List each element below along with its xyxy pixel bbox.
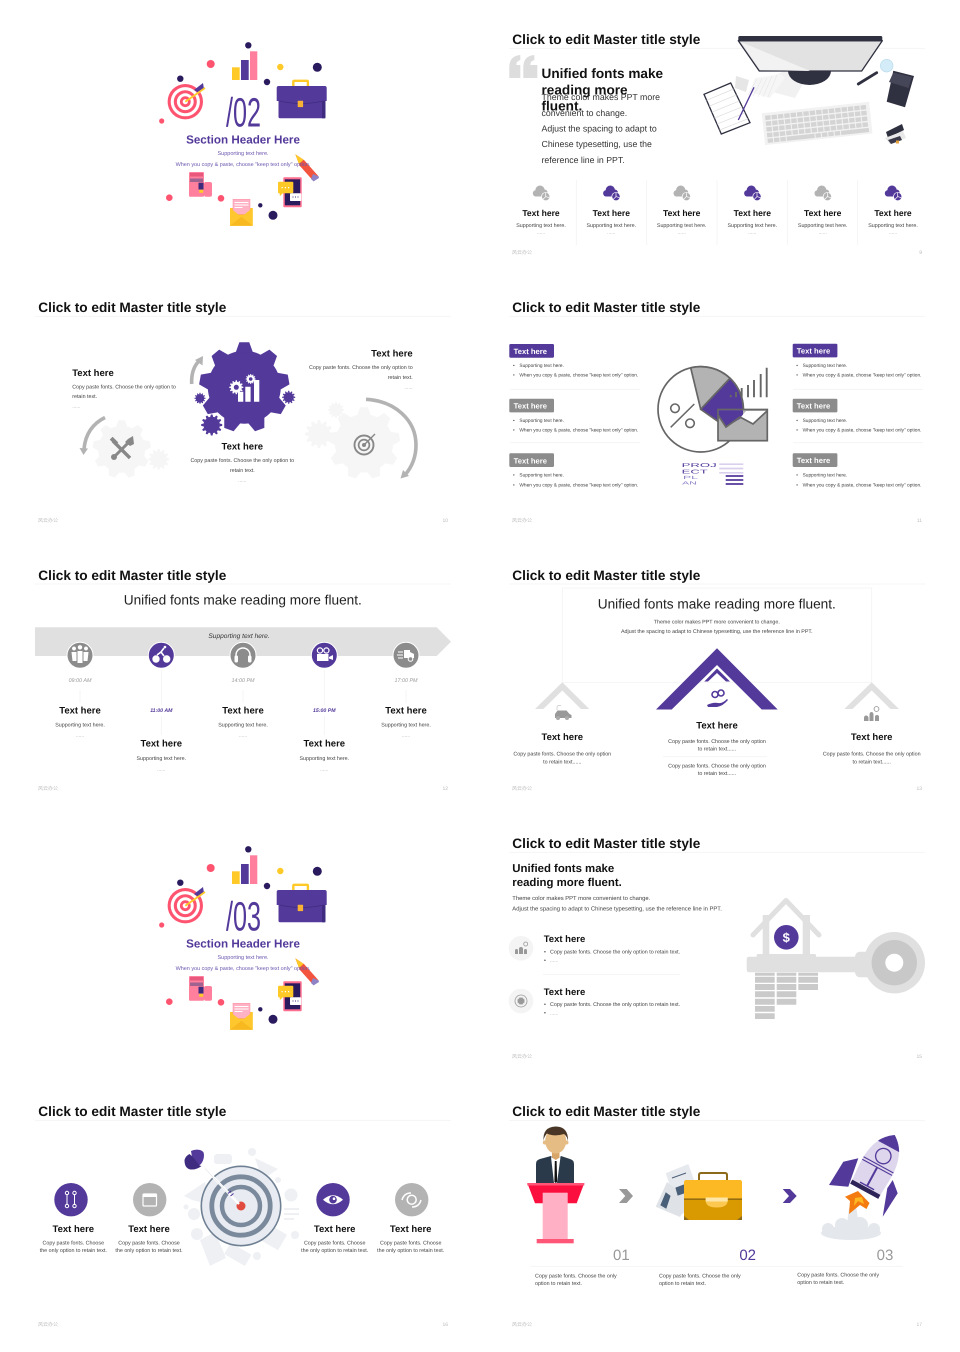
page number: 16: [442, 1322, 448, 1328]
item 4 text: [377, 1224, 444, 1254]
right list item 3: Text here: [797, 456, 830, 465]
right list item 3: •: [796, 474, 798, 479]
left text: Text here: [542, 732, 583, 743]
item 1: Copy paste fonts. Choose the only option to retain text.: [550, 950, 680, 956]
arrow: center gear: [192, 356, 203, 384]
column 5 text: Supporting text here.: [798, 223, 848, 229]
intro text: [512, 895, 722, 912]
right list item 1: Supporting text here.: [803, 363, 847, 369]
item 1: ......: [550, 958, 558, 964]
center text: Text here: [696, 720, 738, 732]
stop 3: [218, 678, 268, 739]
project plan text and bars: PL: [683, 475, 699, 480]
stop 5: ......: [402, 733, 410, 739]
item 1: •: [544, 958, 546, 964]
slide: section header 02: [159, 42, 327, 226]
left text block: retain text.: [72, 394, 97, 400]
step 2 text: option to retain text.: [659, 1281, 706, 1287]
left list item 1: [509, 344, 638, 379]
stop 4: Supporting text here.: [299, 756, 349, 762]
project plan text and bars: PROJ: [682, 463, 717, 469]
illustration: rocket: [821, 1127, 910, 1240]
center text block: Text here: [222, 442, 263, 452]
quote heading: fluent.: [542, 99, 582, 114]
column 5 text: ......: [819, 230, 827, 236]
step 2 text: Copy paste fonts. Choose the only: [659, 1274, 741, 1280]
slide 17: three stages: [509, 1104, 925, 1328]
stop 3: Supporting text here.: [218, 723, 268, 729]
item 1 text: the only option to retain text.: [40, 1248, 107, 1254]
column 2 text: Supporting text here.: [586, 223, 636, 229]
item 3 text: Text here: [314, 1224, 355, 1235]
step 3 text: Copy paste fonts. Choose the only: [797, 1272, 879, 1278]
item 3 text: Copy paste fonts. Choose: [304, 1240, 365, 1246]
footer: 风云办公: [38, 1321, 58, 1328]
column 4 text: Supporting text here.: [727, 223, 777, 229]
center text block: [190, 442, 294, 484]
stop 3: ......: [239, 733, 247, 739]
step 3 text: [797, 1272, 879, 1286]
stop 5: [381, 678, 431, 739]
page number: 15: [916, 1054, 922, 1060]
icon: headphones: [230, 642, 256, 668]
column 6 text: Supporting text here.: [868, 223, 918, 229]
slide 10: gears: [35, 300, 451, 524]
slide 13: roofs: [509, 568, 925, 792]
slide: section header 03: [159, 846, 327, 1030]
column 4 text: [727, 208, 777, 236]
stop 2: Supporting text here.: [136, 756, 186, 762]
stop 2: Text here: [141, 739, 182, 750]
column 1 text: ......: [537, 230, 545, 236]
number 01: 01: [613, 1247, 630, 1264]
step 3 text: option to retain text.: [797, 1280, 844, 1286]
quote body text: Chinese typesetting, use the: [542, 139, 652, 149]
slide 16: target: [35, 1104, 451, 1328]
left list item 3: Supporting text here.: [519, 473, 564, 479]
column 3 text: Text here: [663, 208, 701, 218]
right list item 2: [793, 399, 921, 434]
stop 1: ......: [76, 733, 84, 739]
left list item 1: •: [513, 364, 515, 369]
item 4 text: Text here: [390, 1224, 431, 1235]
center gear with icon: [194, 342, 295, 436]
left list item 2: [509, 399, 638, 434]
column 3 text: Supporting text here.: [657, 223, 707, 229]
right text: to retain text......: [853, 759, 891, 765]
icon: cloud: [533, 186, 550, 201]
left gear with tools icon: [92, 420, 169, 478]
heading: Unified fonts make reading more fluent.: [124, 592, 362, 608]
item 1 text: Text here: [53, 1224, 94, 1235]
title: Click to edit Master title style: [38, 300, 227, 315]
left text: [513, 732, 611, 765]
stop 5: Text here: [385, 705, 427, 716]
number 02: 02: [739, 1247, 756, 1264]
item 2: •: [544, 1011, 546, 1017]
intro frame: [562, 588, 872, 682]
footer: 风云办公: [512, 785, 532, 792]
page number: 11: [917, 518, 922, 524]
item 4 text: Copy paste fonts. Choose: [380, 1240, 441, 1246]
icon: hand with coins: [707, 690, 728, 707]
right list item 2: When you copy & paste, choose "keep text only" option.: [803, 428, 921, 434]
stop 1: [55, 678, 105, 739]
column 6 text: ......: [889, 230, 897, 236]
intro text: Adjust the spacing to adapt to Chinese typesetting, use the reference line in PPT.: [512, 906, 722, 912]
left text block: ......: [72, 404, 81, 410]
stop 4: 15:00 PM: [313, 708, 336, 714]
intro text: Theme color makes PPT more convenient to change.: [654, 620, 780, 626]
timeline arrow: [35, 627, 451, 656]
icon: eye: [316, 1183, 350, 1216]
center text: to retain text......: [698, 747, 736, 753]
arrow: left gear: [80, 418, 105, 455]
center text: Copy paste fonts. Choose the only option: [668, 763, 766, 769]
illustration: desk with monitor: [704, 36, 914, 145]
right list item 1: Text here: [797, 346, 830, 355]
project plan text and bars: [682, 463, 743, 486]
icon: link: [54, 1183, 88, 1216]
slide 9: quote and desk: [509, 32, 925, 256]
center text: to retain text......: [698, 771, 736, 777]
icon: cloud: [885, 186, 902, 201]
illustration: speaker at podium: [527, 1126, 584, 1243]
item 4 text: the only option to retain text.: [377, 1248, 444, 1254]
item 1: [509, 934, 680, 964]
stop 2: ......: [157, 766, 165, 772]
stop 1: Text here: [59, 705, 101, 716]
column 1 text: Text here: [522, 208, 560, 218]
number 03: 03: [877, 1247, 893, 1264]
center text: [663, 720, 767, 777]
title: Click to edit Master title style: [38, 568, 227, 583]
icon: cloud: [744, 186, 762, 201]
page number: 9: [919, 250, 922, 256]
column 6 text: [868, 208, 918, 236]
column 1 text: Supporting text here.: [516, 223, 566, 229]
left list item 2: Supporting text here.: [519, 418, 564, 424]
intro text: Theme color makes PPT more convenient to change.: [512, 895, 651, 902]
section note: When you copy & paste, choose "keep text only" option.: [176, 966, 311, 972]
heading: reading more fluent.: [512, 877, 622, 889]
stop 5: Supporting text here.: [381, 723, 431, 729]
section supporting text: Supporting text here.: [217, 955, 269, 961]
left text block: Copy paste fonts. Choose the only option to: [72, 384, 176, 390]
illustration: section icons: [159, 846, 327, 1030]
column 1 text: [516, 208, 566, 236]
background doodles: [184, 1148, 299, 1266]
right text block: ......: [404, 385, 413, 391]
column 4 text: ......: [748, 230, 756, 236]
intro text: Adjust the spacing to adapt to Chinese typesetting, use the reference line in PPT.: [621, 629, 813, 635]
stop 2: 11:00 AM: [150, 708, 173, 714]
column 5 text: [798, 208, 848, 236]
right list item 2: Supporting text here.: [803, 418, 847, 424]
left text: Copy paste fonts. Choose the only option: [513, 752, 611, 758]
section heading: Section Header Here: [186, 134, 300, 146]
column 3 text: [657, 208, 707, 236]
right list item 2: •: [796, 419, 798, 424]
stop 3: Text here: [222, 705, 264, 716]
arrow caption: Supporting text here.: [208, 633, 270, 640]
item 1 text: Copy paste fonts. Choose: [43, 1240, 104, 1246]
left list item 1: When you copy & paste, choose "keep text only" option.: [519, 373, 638, 379]
column 4 text: Text here: [734, 208, 771, 218]
right list item 1: When you copy & paste, choose "keep text only" option.: [803, 373, 921, 379]
quote body text: reference line in PPT.: [542, 155, 625, 165]
project plan text and bars: AN: [682, 480, 697, 486]
pie chart with envelope and bars: [658, 367, 767, 452]
icon: cloud: [603, 186, 620, 201]
step 1 text: Copy paste fonts. Choose the only: [535, 1274, 617, 1280]
left list item 2: Text here: [514, 402, 547, 411]
quote heading: Unified fonts make: [542, 66, 664, 81]
left list item 3: When you copy & paste, choose "keep text only" option.: [519, 482, 638, 488]
left list item 3: •: [513, 474, 515, 479]
item 2 text: [115, 1224, 183, 1254]
right text block: retain text.: [388, 375, 413, 381]
section number: /02: [226, 90, 261, 136]
column 5 text: Text here: [804, 208, 842, 218]
title: Click to edit Master title style: [38, 1104, 227, 1119]
left list item 3: Text here: [514, 456, 547, 465]
column 6 text: Text here: [874, 208, 912, 218]
step 1 text: option to retain text.: [535, 1281, 582, 1287]
feature columns: [516, 180, 918, 245]
item 2 text: the only option to retain text.: [115, 1248, 183, 1254]
section note: When you copy & paste, choose "keep text only" option.: [176, 162, 311, 168]
right list item 2: •: [796, 428, 798, 434]
slide 15: key: [509, 836, 925, 1060]
icon: car: [555, 706, 572, 720]
icon: cloud: [814, 186, 832, 201]
footer: 风云办公: [38, 517, 58, 524]
heading: Unified fonts make reading more fluent.: [598, 597, 836, 612]
page number: 13: [916, 786, 922, 792]
right list item 3: •: [796, 483, 798, 488]
quote heading: reading more: [542, 83, 628, 98]
arrow 2: [783, 1189, 797, 1203]
icon: calendar: [133, 1183, 166, 1216]
left roof: [535, 682, 589, 709]
stop 4: ......: [320, 766, 328, 772]
right list item 1: •: [796, 374, 798, 379]
stop 4: Text here: [304, 739, 345, 750]
right roof: [844, 682, 899, 709]
illustration: briefcase and papers: [656, 1164, 742, 1220]
title: Click to edit Master title style: [512, 300, 701, 315]
right text: [823, 732, 921, 765]
left list item 1: Supporting text here.: [519, 363, 564, 369]
item 3 text: the only option to retain text.: [301, 1248, 368, 1254]
right text: Copy paste fonts. Choose the only option: [823, 752, 921, 758]
page number: 10: [442, 518, 448, 524]
left text block: [72, 368, 176, 410]
item 2: ......: [550, 1011, 558, 1017]
left text block: Text here: [72, 368, 114, 379]
right list item 1: [793, 344, 921, 379]
left list item 1: Text here: [514, 347, 547, 356]
icon: delivery truck: [393, 642, 419, 668]
title: Click to edit Master title style: [512, 836, 701, 851]
center text block: Copy paste fonts. Choose the only option to: [190, 458, 294, 464]
item 1 text: [40, 1224, 107, 1254]
page number: 12: [442, 786, 448, 792]
right list item 3: When you copy & paste, choose "keep text only" option.: [803, 482, 921, 488]
title: Click to edit Master title style: [512, 1104, 701, 1119]
slide 11: pie chart and lists: [509, 300, 925, 524]
item 2 text: Text here: [128, 1224, 170, 1235]
intro text: [621, 620, 813, 635]
item 2: Text here: [544, 987, 585, 998]
right text: Text here: [851, 732, 892, 743]
stop 2: [136, 708, 186, 772]
right list item 3: Supporting text here.: [803, 473, 847, 479]
icon: people: [67, 642, 93, 668]
right list item 3: [793, 453, 921, 488]
arrow 1: [619, 1189, 633, 1203]
step 2 text: [659, 1274, 741, 1287]
center roof: [656, 648, 778, 710]
footer: 风云办公: [512, 1321, 532, 1328]
column 2 text: [586, 208, 636, 236]
center text: Copy paste fonts. Choose the only option: [668, 739, 766, 745]
slide 12: timeline: [35, 568, 451, 792]
stop 5: 17:00 PM: [394, 678, 418, 684]
section heading: Section Header Here: [186, 938, 300, 950]
footer: 风云办公: [512, 517, 532, 524]
center text block: retain text.: [230, 468, 255, 474]
icon: people with coin: [864, 707, 879, 721]
icon: video camera: [311, 642, 337, 668]
footer: 风云办公: [38, 785, 58, 792]
item 3 text: [301, 1224, 368, 1254]
section number: /03: [226, 894, 261, 940]
section supporting text: Supporting text here.: [217, 151, 269, 157]
right list item 2: Text here: [797, 401, 830, 410]
icon: sync: [395, 1183, 428, 1216]
illustration: house key: $: [783, 930, 791, 945]
arrow: right gear: [366, 399, 416, 478]
footer: 风云办公: [512, 249, 532, 256]
stop 1: Supporting text here.: [55, 723, 105, 729]
project plan text and bars: ECT: [682, 470, 709, 476]
illustration: section icons: [159, 42, 327, 226]
item 2: [509, 987, 680, 1017]
left text: to retain text......: [543, 759, 581, 765]
item 2 text: Copy paste fonts. Choose: [118, 1240, 180, 1246]
stop 4: [299, 708, 349, 772]
title: Click to edit Master title style: [512, 568, 701, 583]
heading: Unified fonts make: [512, 863, 614, 875]
stop 1: 09:00 AM: [69, 678, 92, 684]
item 2: Copy paste fonts. Choose the only option to retain text.: [550, 1002, 680, 1008]
right gear with target icon: [305, 402, 401, 479]
center text block: ......: [238, 478, 246, 484]
left list item 2: •: [513, 419, 515, 424]
column 2 text: Text here: [593, 208, 630, 218]
quote body text: Theme color makes PPT more: [542, 92, 660, 102]
title: Click to edit Master title style: [512, 32, 701, 47]
quote mark: [509, 55, 537, 78]
left list item 2: •: [513, 428, 515, 434]
icon: cloud: [674, 186, 691, 201]
quote body text: convenient to change.: [542, 108, 627, 118]
column 2 text: ......: [607, 230, 615, 236]
right text block: Copy paste fonts. Choose the only option to: [309, 365, 413, 371]
right text block: [309, 349, 413, 391]
left list item 2: When you copy & paste, choose "keep text only" option.: [519, 428, 638, 434]
left list item 1: •: [513, 374, 515, 379]
left list item 3: •: [513, 483, 515, 488]
stop 3: 14:00 PM: [231, 678, 255, 684]
right text block: Text here: [371, 349, 413, 360]
step 1 text: [535, 1274, 617, 1287]
page number: 17: [916, 1322, 922, 1328]
illustration: house key: [747, 900, 925, 1019]
item 2: •: [544, 1002, 546, 1008]
quote body text: Adjust the spacing to adapt to: [542, 123, 657, 133]
column 3 text: ......: [678, 230, 686, 236]
item 1: Text here: [544, 934, 585, 945]
target with dart: [184, 1150, 281, 1246]
item 1: •: [544, 950, 546, 956]
icon: bicycle: [148, 642, 174, 668]
left list item 3: [509, 453, 638, 488]
right list item 1: •: [796, 364, 798, 369]
footer: 风云办公: [512, 1053, 532, 1060]
